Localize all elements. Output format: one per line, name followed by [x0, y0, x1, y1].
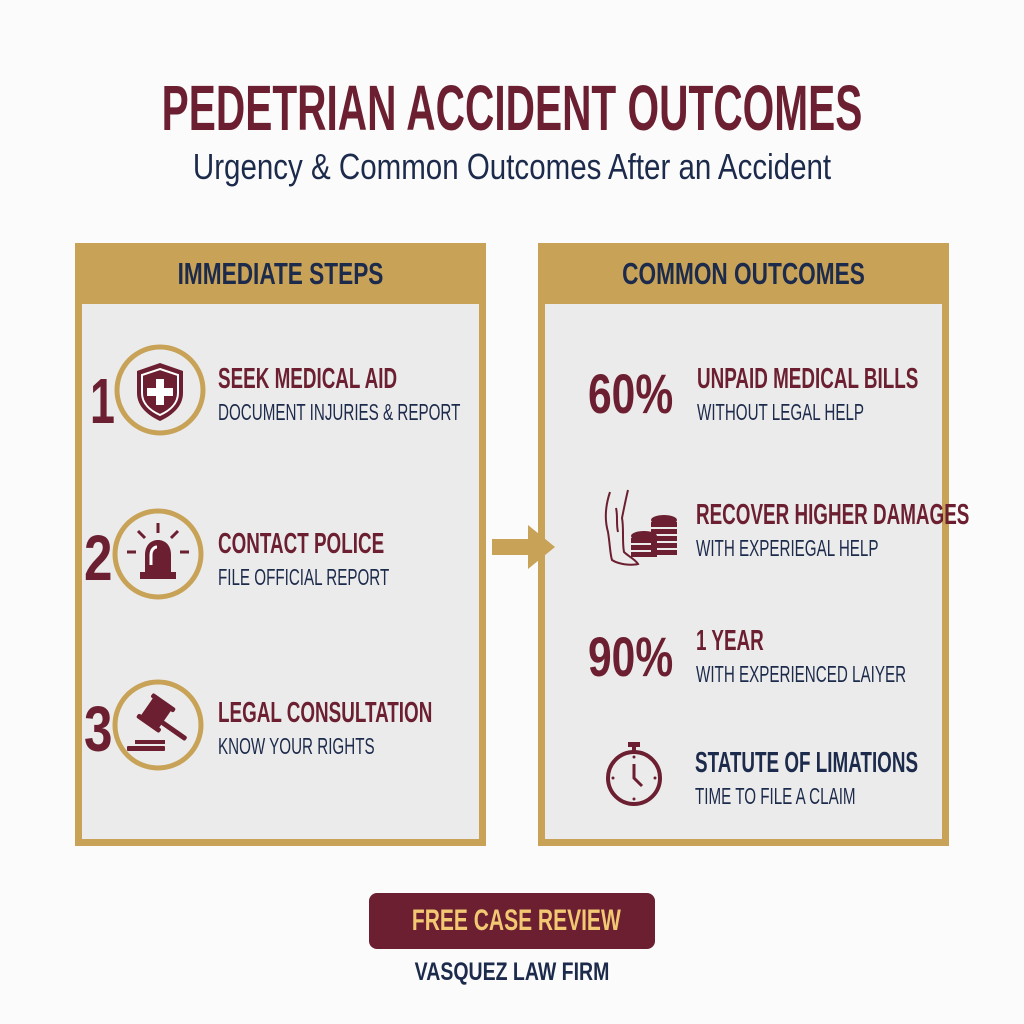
step 1 [90, 344, 460, 437]
stat 60%: 60% [588, 362, 673, 425]
number 3: 3 [84, 693, 112, 765]
icon: siren [112, 508, 204, 600]
arrow [492, 525, 555, 569]
icon: gavel [112, 680, 204, 770]
subtitle: Urgency & Common Outcomes After an Accident [193, 146, 831, 187]
panel: common outcomes [538, 243, 949, 846]
step 1: DOCUMENT INJURIES & REPORT [218, 399, 460, 425]
icon: leg and coins [604, 490, 677, 566]
text: recover higher damages: RECOVER HIGHER DAMAGES [696, 499, 969, 531]
text: contact police: CONTACT POLICE [218, 528, 384, 560]
text: statute of limitations: STATUTE OF LIMATIONS [695, 747, 918, 779]
outcome 3: WITH EXPERIENCED LAIYER [696, 661, 906, 687]
outcome 3 [588, 625, 906, 688]
number 1: 1 [90, 365, 115, 437]
text: legal consultation: LEGAL CONSULTATION [218, 697, 432, 729]
text: unpaid medical bills: UNPAID MEDICAL BILLS [697, 363, 918, 395]
icon: shield [114, 344, 206, 436]
button label: FREE CASE REVIEW [412, 904, 621, 937]
panel: immediate steps [75, 243, 486, 846]
step 2: FILE OFFICIAL REPORT [218, 564, 389, 590]
step 2 [84, 508, 389, 600]
heading: common outcomes: COMMON OUTCOMES [622, 256, 865, 291]
button: free case review [369, 893, 655, 949]
title: PEDETRIAN ACCIDENT OUTCOMES [162, 72, 862, 144]
outcome 2: WITH EXPERIEGAL HELP [696, 535, 878, 561]
text: 1 year: 1 YEAR [696, 625, 764, 657]
outcome 4: TIME TO FILE A CLAIM [695, 783, 856, 809]
step 3 [84, 680, 432, 770]
outcome 1: WITHOUT LEGAL HELP [697, 399, 864, 425]
heading: immediate steps: IMMEDIATE STEPS [178, 256, 383, 291]
step 3: KNOW YOUR RIGHTS [218, 733, 375, 759]
text: seek medical aid: SEEK MEDICAL AID [218, 363, 397, 395]
outcome 2 [604, 490, 969, 566]
stat 90%: 90% [588, 625, 673, 688]
footer: firm name: VASQUEZ LAW FIRM [415, 958, 609, 986]
number 2: 2 [84, 522, 112, 594]
icon: stopwatch [606, 742, 662, 806]
outcome 1 [588, 362, 918, 425]
outcome 4 [606, 742, 918, 809]
